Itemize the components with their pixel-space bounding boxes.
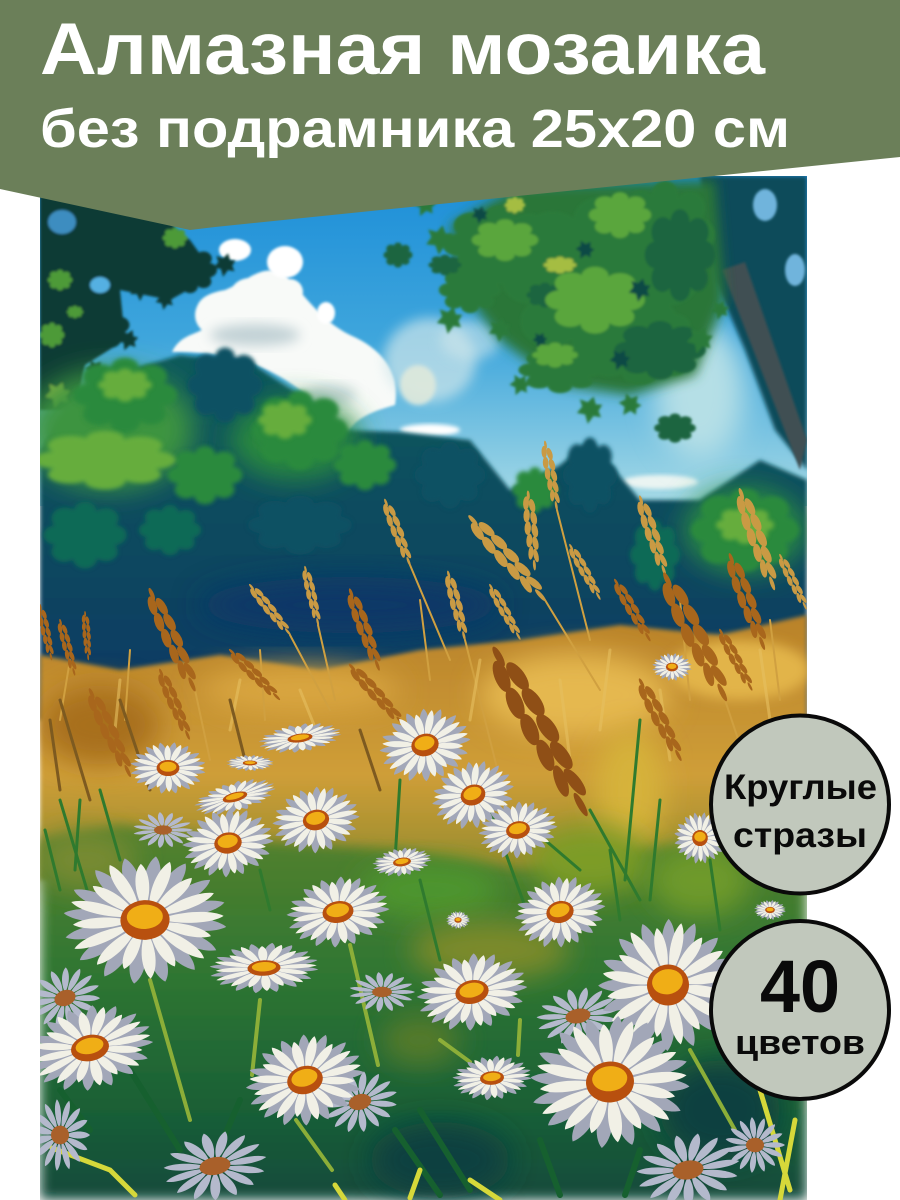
wheat stems and grass blades bbox=[45, 510, 795, 1200]
left tree foliage bbox=[40, 194, 239, 411]
badge: 40 colours: 40 bbox=[760, 945, 840, 1028]
badge: round rhinestones bbox=[711, 716, 889, 894]
golden wheat field bbox=[40, 615, 810, 880]
badge: 40 colours: цветов bbox=[735, 1024, 865, 1062]
title: Алмазная мозаика bbox=[40, 9, 767, 90]
wheat ears bbox=[34, 439, 812, 825]
daisies bbox=[19, 653, 786, 1200]
badge: round rhinestones: стразы bbox=[733, 816, 867, 855]
green title banner bbox=[0, 0, 900, 230]
distant forest bbox=[25, 348, 807, 720]
green meadow bbox=[35, 825, 807, 1200]
subtitle: без подрамника 25х20 см bbox=[40, 99, 790, 159]
clouds bbox=[172, 239, 745, 489]
right tree trunk and shadow bbox=[700, 176, 807, 470]
badge: round rhinestones: Круглые bbox=[724, 768, 877, 807]
badge: 40 colours bbox=[711, 921, 889, 1099]
sky bbox=[40, 176, 807, 506]
painting: daisy meadow bbox=[19, 176, 812, 1200]
right tree foliage bbox=[383, 180, 732, 443]
